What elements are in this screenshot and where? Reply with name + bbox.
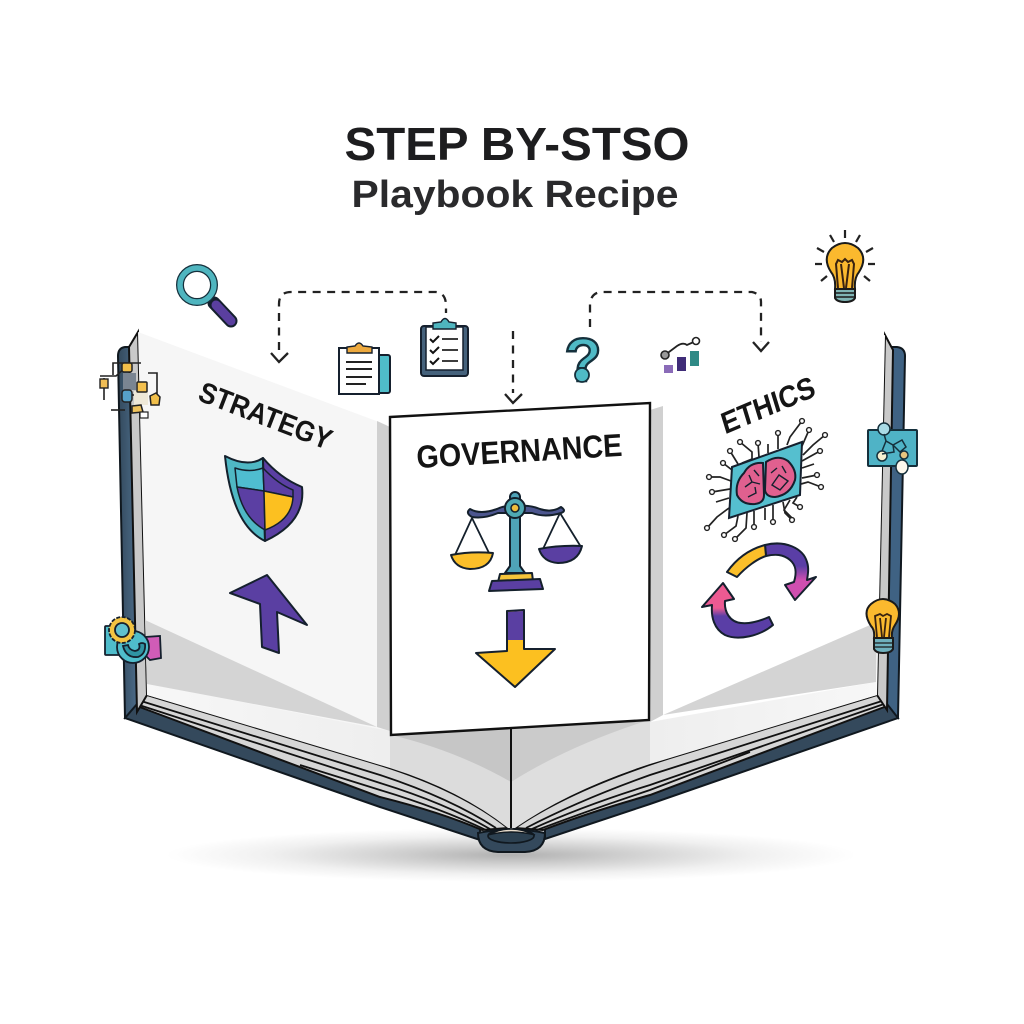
icon: cycle arrows: [702, 544, 816, 638]
right page: [650, 335, 885, 762]
centre crease: [510, 729, 512, 828]
icon: checklist clipboard: [421, 318, 468, 376]
icon: down arrow: [476, 610, 555, 687]
right inner fold: [650, 406, 663, 722]
spine inner ellipse: [488, 829, 534, 843]
left inner fold: [377, 421, 390, 731]
left page shadow: [145, 620, 377, 727]
icon: magnifier: [180, 268, 231, 321]
centre card: [390, 403, 650, 735]
icon: light bulb right edge: [866, 599, 899, 653]
spine highlight: [488, 829, 535, 835]
icon: gear and link on left edge: [105, 617, 161, 663]
spine: [478, 830, 545, 852]
panel: governance: [415, 427, 623, 687]
icon: network panel on right edge: [868, 423, 917, 474]
heading governance: GOVERNANCE: [415, 427, 623, 475]
left page bottom strip: [147, 684, 390, 768]
dashed arrow right: [590, 292, 769, 351]
icon: scales: [451, 492, 582, 591]
right page stack: [515, 695, 887, 830]
icon: brain chip: [705, 419, 827, 541]
right cover: [886, 347, 905, 718]
ground shadow: [166, 828, 856, 882]
icon: question mark: ?: [564, 326, 602, 394]
right page shadow: [663, 622, 877, 715]
heading ethics: ETHICS: [717, 371, 819, 441]
left page: [138, 332, 391, 765]
cover base right: [545, 704, 898, 839]
under-card shadows: [391, 729, 511, 782]
left page stack: [137, 695, 508, 830]
icon: flow nodes on left edge: [100, 363, 160, 418]
left cover: [118, 347, 139, 718]
icon: clipboard document: [339, 343, 390, 394]
panel: strategy: [194, 377, 336, 653]
dashed arrow left: [271, 292, 446, 362]
right gutter strip: [877, 335, 893, 710]
title line 2: Playbook Recipe: [352, 174, 678, 216]
cover base left: [125, 704, 480, 840]
icon: mini chart: [661, 338, 700, 373]
centre floor right: [511, 720, 650, 828]
panel: ethics: [702, 371, 827, 638]
title: [344, 118, 690, 216]
title line 1: STEP BY-STSO: [344, 118, 690, 170]
icon: shield: [225, 456, 302, 541]
right page bottom strip: [650, 682, 877, 764]
dashed arrow centre: [505, 331, 522, 403]
open book: [118, 332, 905, 852]
centre floor left: [390, 727, 511, 828]
heading strategy: STRATEGY: [194, 377, 336, 457]
icon: light bulb top: [815, 230, 875, 302]
left gutter strip: [129, 332, 147, 712]
icon: up arrow: [230, 575, 307, 653]
